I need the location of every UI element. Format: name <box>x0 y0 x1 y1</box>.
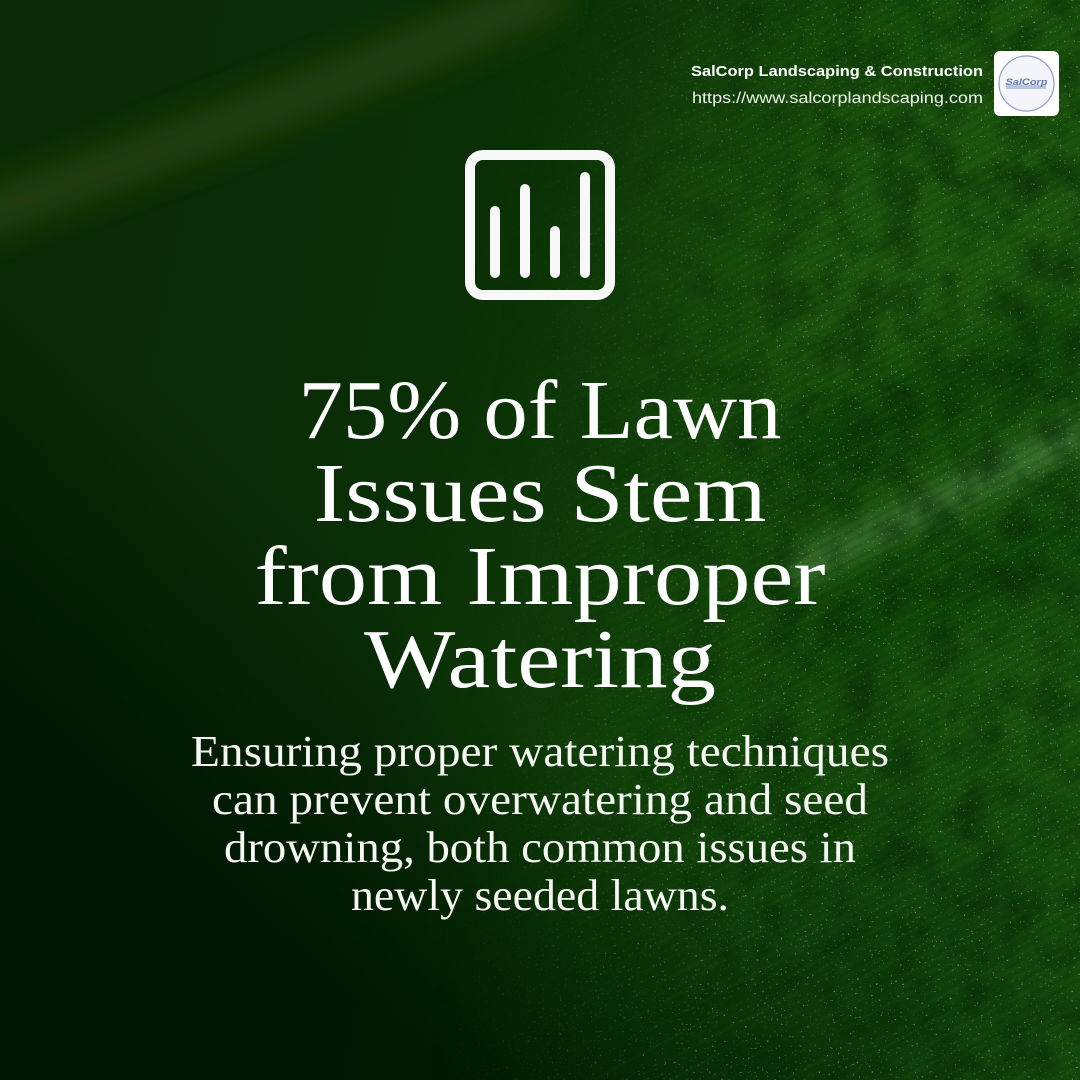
supporting text: Ensuring proper watering techniques <box>191 727 889 776</box>
website url: https://www.salcorplandscaping.com <box>692 90 983 107</box>
brand name: SalCorp Landscaping & Construction <box>691 63 983 80</box>
icon: bar chart in rounded square <box>470 155 610 295</box>
title: Issues Stem <box>314 447 766 540</box>
title <box>254 364 826 706</box>
logo badge: SalCorp <box>1006 77 1048 88</box>
logo badge <box>994 51 1059 116</box>
supporting text: drowning, both common issues in <box>224 823 856 872</box>
supporting text <box>191 727 889 920</box>
brand header <box>691 51 1059 116</box>
title: Watering <box>364 613 716 706</box>
supporting text: can prevent overwatering and seed <box>212 775 868 824</box>
title: 75% of Lawn <box>298 364 782 457</box>
supporting text: newly seeded lawns. <box>351 871 729 920</box>
title: from Improper <box>254 530 826 623</box>
